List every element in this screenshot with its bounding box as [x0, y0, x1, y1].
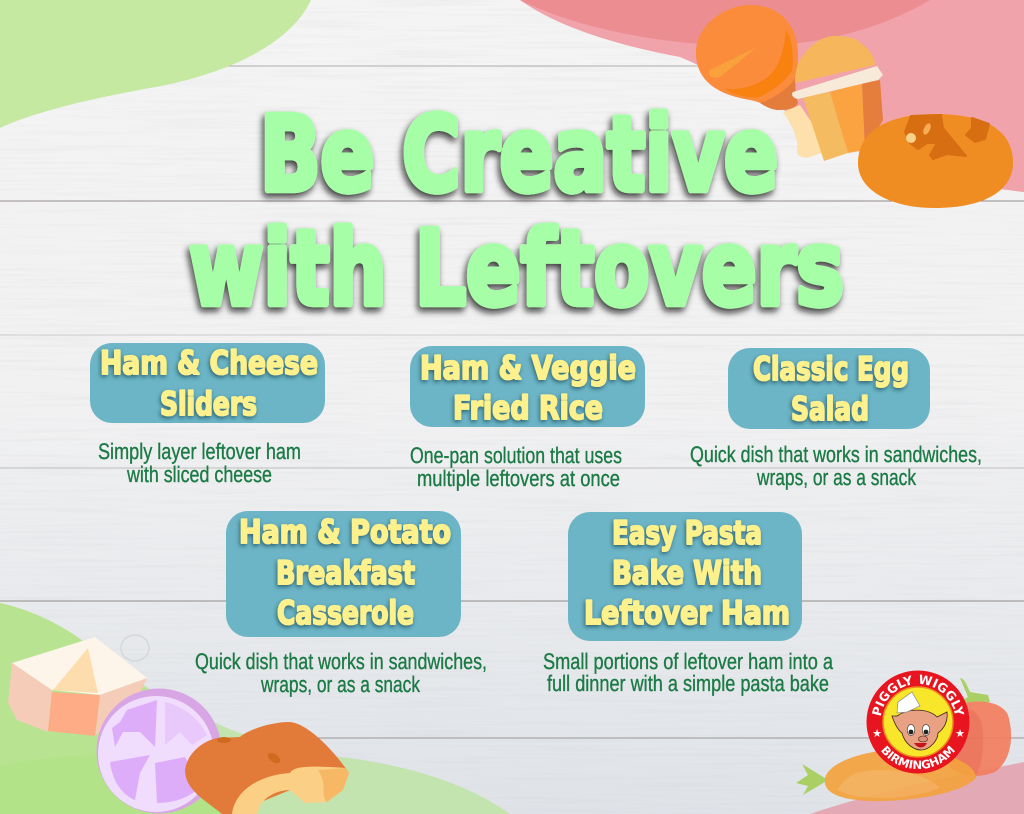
card 5: Easy Pasta Bake With Leftover Ham: Leftover Ham [584, 594, 790, 632]
icon: purple onion slice [96, 688, 222, 814]
card 5 description [543, 649, 833, 696]
card 5 description: Small portions of leftover ham into a [543, 649, 833, 674]
icon: potato [185, 722, 349, 814]
decorative blob: top-right pink [520, 0, 1024, 192]
logo: Piggly Wiggly Birmingham [866, 670, 970, 774]
title [189, 95, 844, 329]
title: Be Creative [260, 95, 778, 215]
pig face [892, 710, 947, 750]
logo bottom text: BIRMINGHAM [881, 746, 955, 769]
paper hat [897, 692, 920, 713]
card 3 description: wraps, or as a snack [756, 465, 917, 490]
card 4: Ham & Potato Breakfast Casserole: Breakfast [276, 554, 415, 592]
card 2: Ham & Veggie Fried Rice: Ham & Veggie [420, 349, 636, 387]
logo stars: ★ [872, 727, 882, 740]
icon: cheese wedge [8, 637, 147, 736]
decorative blob: bottom-left green [0, 603, 510, 814]
title: with Leftovers [189, 209, 844, 329]
card 1: Ham & Cheese Sliders [90, 343, 325, 487]
icon: muffin [792, 36, 883, 161]
icon: chicken drumstick [696, 5, 830, 158]
card 4 description [195, 649, 487, 697]
logo top text: PIGGLY WIGGLY [872, 674, 964, 716]
card 3 description [690, 442, 982, 490]
icon: carrot [796, 749, 976, 801]
card 1 description: with sliced cheese [126, 462, 272, 487]
logo star right: ★ [955, 727, 965, 740]
icon: bell pepper [948, 678, 1011, 776]
card 2 description: multiple leftovers at once [417, 466, 620, 491]
card 3: Classic Egg Salad [690, 348, 982, 490]
card 5: Easy Pasta Bake With Leftover Ham [543, 512, 833, 696]
card 3: Classic Egg Salad: Classic Egg [753, 350, 909, 388]
card 5: Easy Pasta Bake With Leftover Ham: Bake With [612, 554, 762, 592]
card 1: Ham & Cheese Sliders: Sliders [160, 385, 257, 423]
card 2: Ham & Veggie Fried Rice [410, 346, 645, 491]
icon: bread roll [858, 114, 1013, 208]
card 4: Ham & Potato Breakfast Casserole: Casserole [277, 594, 414, 632]
card 2 description [410, 443, 622, 491]
card 2 description: One-pan solution that uses [410, 443, 622, 468]
card 1 description [98, 439, 301, 487]
card 2: Ham & Veggie Fried Rice: Fried Rice [453, 389, 603, 427]
card 5 description: full dinner with a simple pasta bake [547, 671, 829, 696]
card 1: Ham & Cheese Sliders: Ham & Cheese [100, 344, 318, 382]
card 4: Ham & Potato Breakfast Casserole: Ham & Potato [239, 513, 451, 551]
card 3: Classic Egg Salad: Salad [791, 390, 869, 428]
card 4: Ham & Potato Breakfast Casserole [195, 511, 487, 697]
decorative blob: top-left green [0, 0, 311, 128]
card 1 description: Simply layer leftover ham [98, 439, 301, 464]
card 4 description: wraps, or as a snack [260, 672, 421, 697]
card 4 description: Quick dish that works in sandwiches, [195, 649, 487, 674]
decorative blob: bottom-right pink [810, 762, 1024, 814]
card 5: Easy Pasta Bake With Leftover Ham: Easy Pasta [612, 514, 762, 552]
